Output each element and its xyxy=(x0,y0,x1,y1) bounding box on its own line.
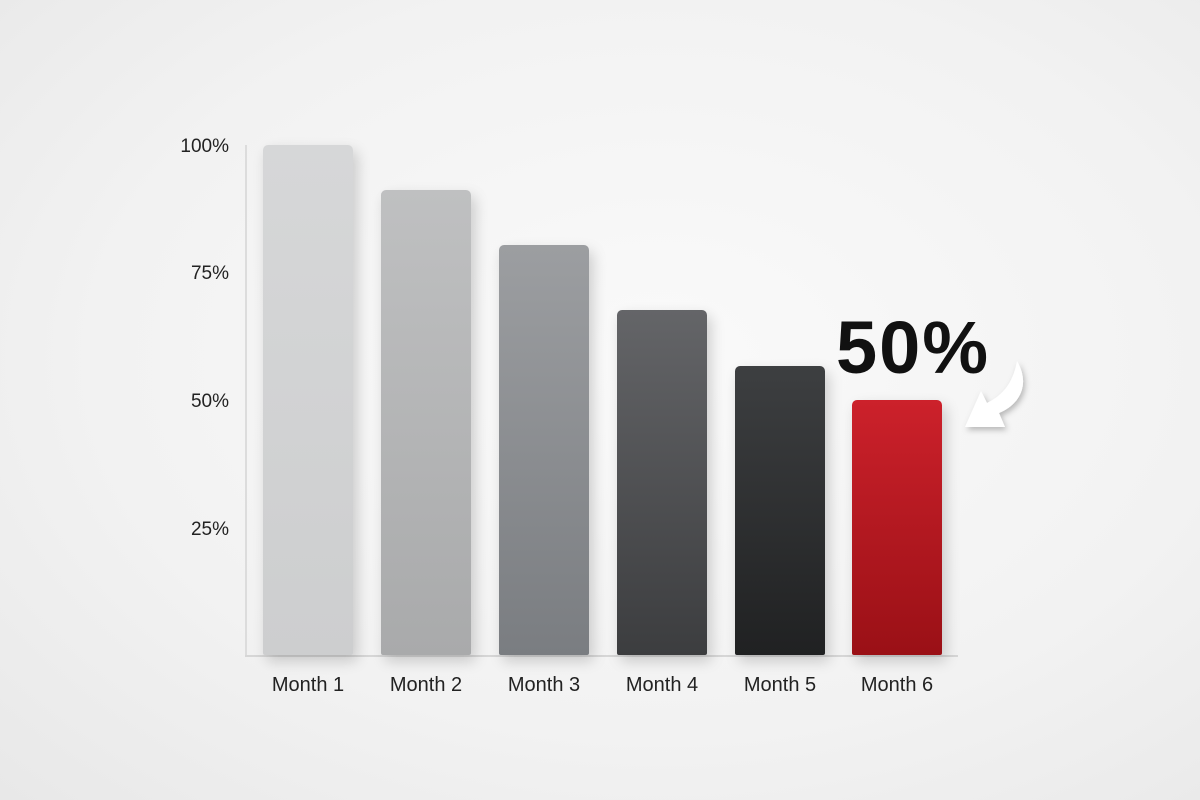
month labels: Month 1 xyxy=(272,674,344,696)
x axis baseline xyxy=(245,655,958,657)
month labels: Month 2 xyxy=(390,674,462,696)
y axis labels: 100% xyxy=(180,136,229,157)
icon: curved arrow xyxy=(966,362,1028,433)
callout: 50%: 50% xyxy=(836,306,990,389)
y axis labels: 75% xyxy=(191,263,229,284)
bar: month 6 highlighted xyxy=(852,400,942,655)
y axis labels: 50% xyxy=(191,391,229,412)
bar: month 3 xyxy=(499,245,589,655)
bar: month 5 xyxy=(735,366,825,655)
bar: month 2 xyxy=(381,190,471,655)
bar: month 1 xyxy=(263,145,353,655)
y axis labels: 25% xyxy=(191,519,229,540)
bar: month 4 xyxy=(617,310,707,655)
y axis line xyxy=(245,145,247,656)
month labels xyxy=(272,674,933,696)
month labels: Month 6 xyxy=(861,674,933,696)
month labels: Month 5 xyxy=(744,674,816,696)
month labels: Month 4 xyxy=(626,674,698,696)
month labels: Month 3 xyxy=(508,674,580,696)
y axis labels xyxy=(180,136,229,540)
